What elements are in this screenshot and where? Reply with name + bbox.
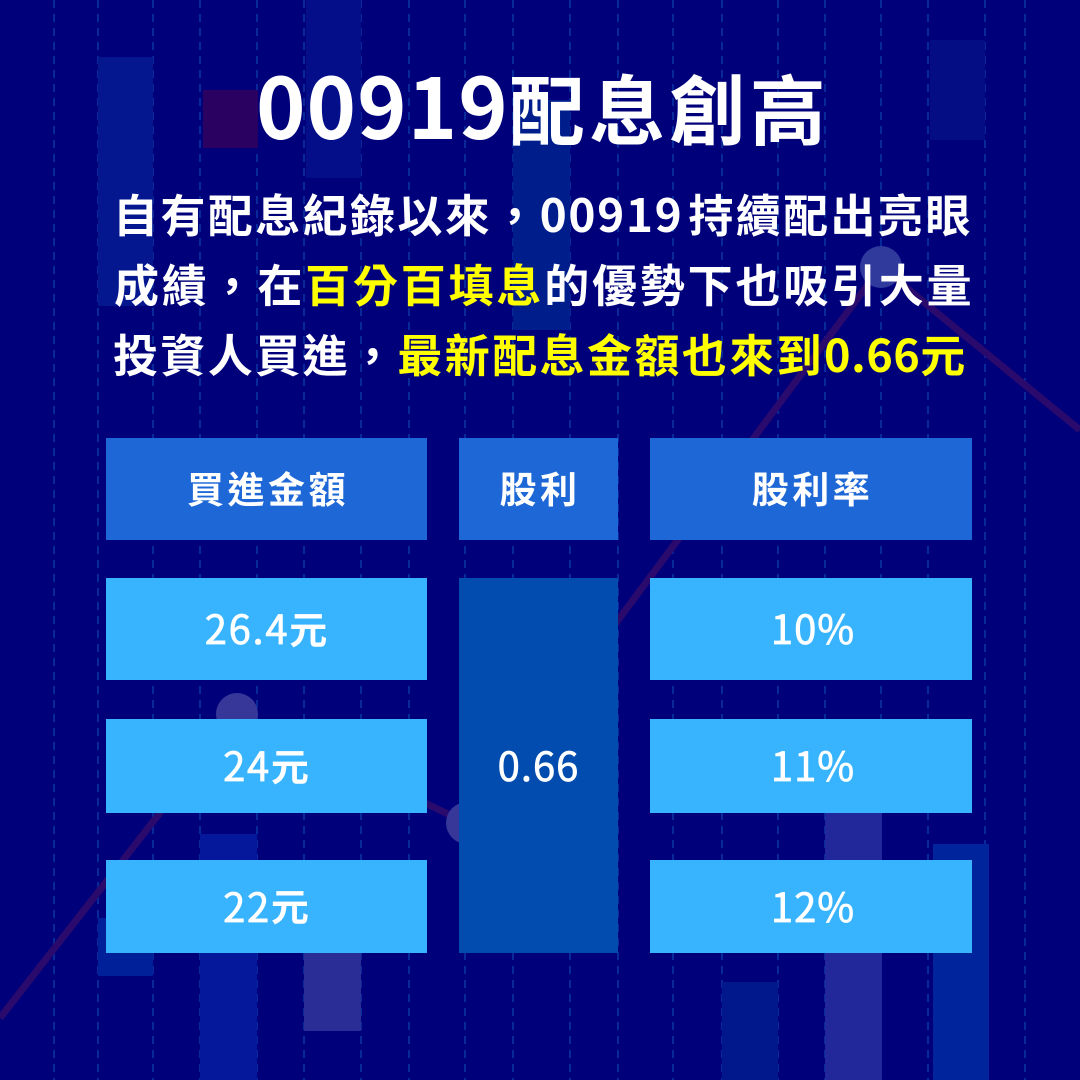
yield 11%: 11% — [771, 735, 855, 793]
yield 10% — [650, 578, 972, 680]
merged dividend cell — [459, 578, 618, 953]
intro text — [113, 180, 974, 385]
table header: yield: 股利率 — [752, 460, 873, 514]
table header: dividend: 股利 — [500, 460, 580, 514]
amount 26.4 — [106, 578, 427, 680]
amount 26.4: 元 — [289, 600, 330, 654]
table header: yield — [650, 438, 972, 540]
table header: purchase amount — [106, 438, 427, 540]
amount 24: 元 — [271, 736, 312, 792]
yield 11% — [650, 719, 972, 813]
intro text: 自有配息紀錄以來，00919持續配出亮眼 — [113, 180, 973, 246]
intro text: 成績，在百分百填息的優勢下也吸引大量 — [114, 250, 974, 315]
amount 22: 元 — [271, 877, 312, 932]
merged dividend cell: 0.66 — [498, 734, 579, 792]
amount 24 — [106, 719, 427, 813]
yield 10%: 10% — [771, 598, 855, 656]
table header: purchase amount: 買進金額 — [187, 460, 349, 514]
title: 00919配息創高 — [256, 43, 830, 164]
amount 22: 22 — [223, 876, 271, 934]
amount 24: 24 — [223, 735, 271, 793]
yield 12%: 12% — [771, 876, 855, 934]
yield 12% — [650, 860, 972, 953]
intro text: 投資人買進，最新配息金額也來到0.66元 — [113, 320, 968, 385]
table header: dividend — [459, 438, 618, 540]
amount 26.4: 26.4 — [205, 598, 289, 656]
amount 22 — [106, 860, 427, 953]
